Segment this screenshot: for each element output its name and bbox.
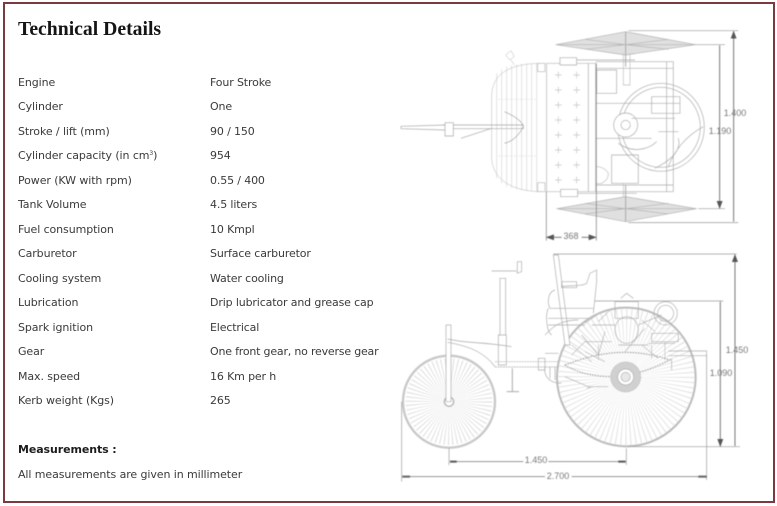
specifications table: One [210, 100, 232, 113]
specifications table [18, 76, 379, 407]
specifications table: Stroke / lift (mm) [18, 125, 110, 138]
measurements heading: Measurements : [18, 443, 117, 456]
specifications table: Spark ignition [18, 321, 93, 334]
specifications table: Gear [18, 345, 44, 358]
specifications table: Drip lubricator and grease cap [210, 296, 374, 309]
specifications table: 90 / 150 [210, 125, 255, 138]
specifications table: One front gear, no reverse gear [210, 345, 378, 358]
specifications table: 954 [210, 149, 231, 162]
dimension labels side view: 1.450 [726, 345, 748, 355]
specifications table: Electrical [210, 321, 259, 334]
specifications table: 265 [210, 394, 231, 407]
specifications table: Cylinder capacity (in cm3) [18, 149, 157, 162]
dimension lines top view [546, 31, 738, 241]
specifications table: Cooling system [18, 272, 101, 285]
specifications table: Carburetor [18, 247, 77, 260]
engine frame and flywheel [560, 53, 704, 197]
specifications table: Kerb weight (Kgs) [18, 394, 114, 407]
top view diagram [401, 31, 738, 241]
dimension labels top view: 1.190 [709, 126, 731, 136]
rear wheel [557, 308, 696, 446]
specifications table: Surface carburetor [210, 247, 311, 260]
dimension labels side view: 1.090 [710, 368, 732, 378]
dimension labels side view: 2.700 [547, 471, 569, 481]
top wheel [556, 32, 696, 67]
seat [538, 63, 596, 192]
side view diagram [402, 254, 740, 482]
specifications table: 16 Km per h [210, 370, 276, 383]
seat and backrest [538, 255, 597, 383]
front wheel [403, 356, 495, 448]
specifications table: Fuel consumption [18, 223, 114, 236]
specifications table: Four Stroke [210, 76, 271, 89]
specifications table: Power (KW with rpm) [18, 174, 132, 187]
dimension labels side view [525, 345, 748, 481]
specifications table: 4.5 liters [210, 198, 257, 211]
engine and drive belt [565, 293, 678, 392]
bottom wheel [557, 185, 697, 222]
specifications table: Max. speed [18, 370, 80, 383]
dimension labels top view: 1.400 [724, 108, 746, 118]
tiller [401, 112, 523, 143]
specifications table: 10 Kmpl [210, 223, 254, 236]
dimension lines side view [402, 254, 740, 482]
specifications table: Engine [18, 76, 55, 89]
dimension labels top view [563, 108, 746, 241]
specifications table: Water cooling [210, 272, 284, 285]
specifications table: 0.55 / 400 [210, 174, 265, 187]
footboard [492, 51, 542, 192]
steering column and frame [446, 262, 707, 402]
dimension labels side view: 1.450 [525, 455, 547, 465]
measurements note: All measurements are given in millimeter [18, 468, 242, 481]
specifications table: Cylinder [18, 100, 63, 113]
dimension labels top view: 368 [563, 231, 579, 241]
specifications table: Tank Volume [18, 198, 86, 211]
specifications table: Lubrication [18, 296, 78, 309]
title: Technical Details [18, 18, 161, 40]
